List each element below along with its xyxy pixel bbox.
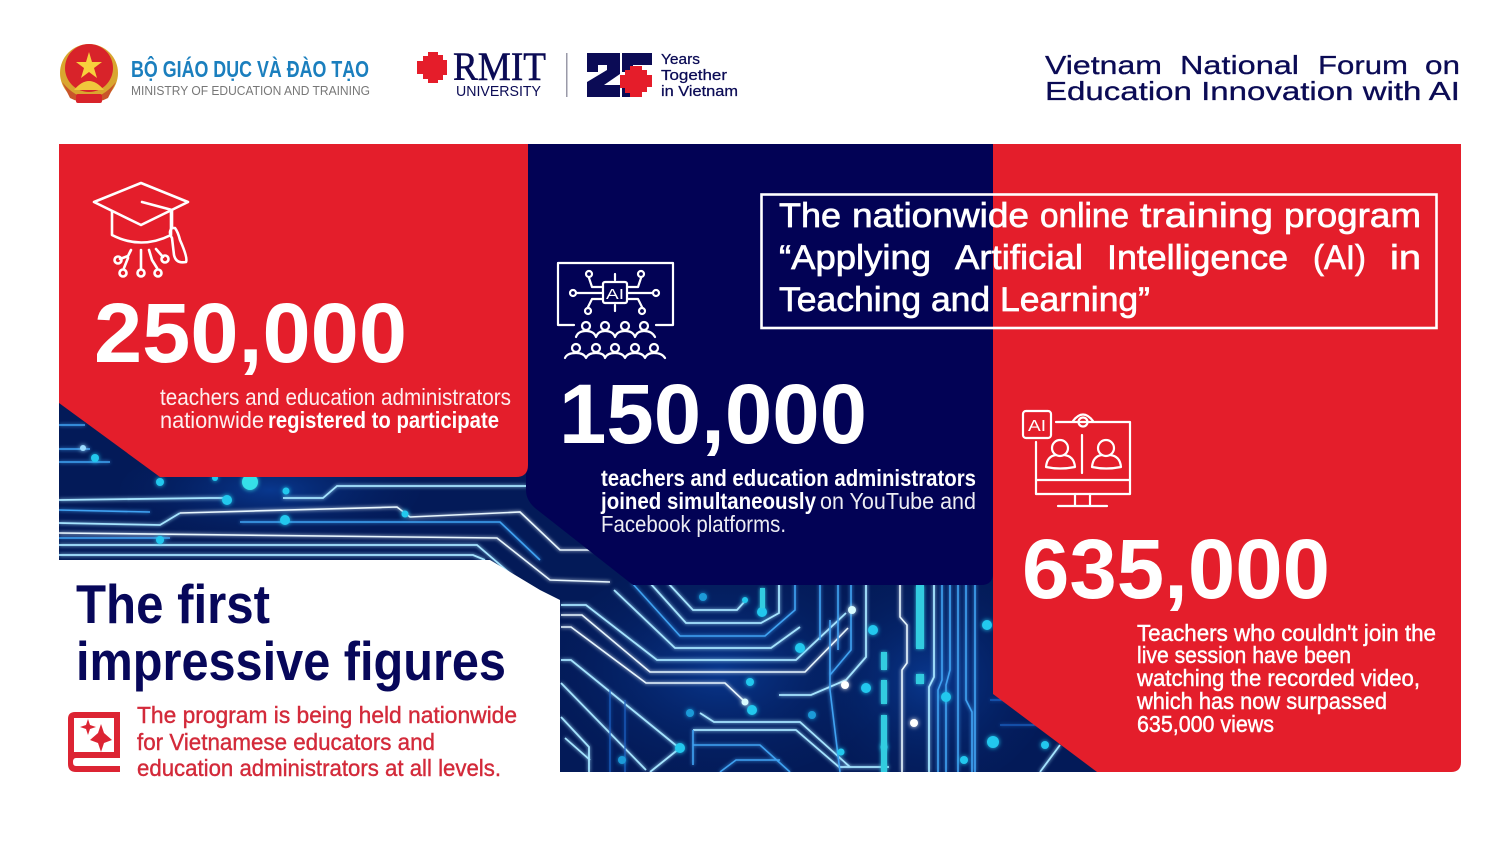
- description 150,000: [600, 465, 976, 537]
- years together text: Years: [661, 52, 700, 68]
- heading: The first impressive figures: impressive figures: [76, 630, 506, 692]
- header: 25 years together logo: [587, 52, 738, 100]
- program title text: in: [1390, 239, 1421, 277]
- number 635,000: 635,000: [1022, 522, 1330, 616]
- header: forum title: Forum: [1318, 50, 1408, 80]
- program title text: [779, 197, 1421, 319]
- number 150,000: 150,000: [559, 367, 867, 461]
- circuit board background image: [59, 403, 1100, 790]
- stat block: 635,000 views: [1022, 411, 1436, 737]
- program title text: (AI): [1313, 239, 1366, 277]
- box outline: [762, 194, 1436, 328]
- description 250,000: nationwide: [160, 407, 264, 433]
- icon: number 25: [587, 53, 652, 97]
- University wordmark: UNIVERSITY: [456, 83, 541, 100]
- header: forum title: National: [1180, 50, 1299, 80]
- RMIT wordmark: RMIT: [453, 44, 546, 89]
- panel: red 250,000: [59, 144, 528, 477]
- header: forum title: Education Innovation with AI: [1045, 76, 1460, 106]
- description 250,000: [160, 384, 511, 433]
- description 150,000: on YouTube and: [820, 488, 976, 514]
- description 150,000: teachers and education administrators: [601, 465, 976, 491]
- years together text: [661, 52, 738, 100]
- heading: The first impressive figures: [76, 573, 506, 692]
- icon: national emblem: [60, 44, 118, 103]
- program title text: Intelligence: [1107, 239, 1288, 277]
- stat block: 250,000 registered: [94, 183, 511, 433]
- description 150,000: joined simultaneously: [600, 488, 816, 514]
- description 250,000: registered to participate: [268, 407, 499, 433]
- panel: red 635,000: [993, 144, 1461, 772]
- description 635,000: Teachers who couldn't join the: [1137, 620, 1436, 646]
- program title text: online: [1040, 197, 1129, 235]
- icon: red book with sparkles: [68, 712, 120, 772]
- header: ministry of education logo: [60, 44, 370, 103]
- description 635,000: 635,000 views: [1137, 711, 1274, 737]
- years together text: Together: [661, 68, 727, 84]
- panel: navy 150,000: [526, 144, 993, 585]
- program title text: The: [779, 197, 841, 235]
- program title text: program: [1284, 197, 1421, 235]
- icon label: AI: AI: [606, 286, 624, 303]
- program title text: “Applying: [779, 239, 931, 277]
- description 150,000: Facebook platforms.: [601, 511, 786, 537]
- panel: white heading area: [59, 560, 560, 790]
- years together text: in Vietnam: [661, 84, 738, 100]
- text block: program description: [137, 702, 517, 781]
- icon: RMIT red pixel circle: [417, 52, 447, 83]
- icon: AI chip with audience: [558, 263, 673, 358]
- icon: monitor with AI and two users: [1023, 411, 1130, 506]
- heading: The first impressive figures: The first: [76, 573, 270, 635]
- text block: program description: education administrators at all levels.: [137, 755, 501, 781]
- callout: program title box: [762, 194, 1436, 328]
- icon: graduation cap with circuits: [94, 183, 188, 276]
- icon label: AI: AI: [1028, 418, 1046, 435]
- header: forum title: on: [1425, 50, 1460, 80]
- description 635,000: live session have been: [1137, 642, 1351, 668]
- text block: program description: The program is being held nationwide: [137, 702, 517, 728]
- number 250,000: 250,000: [94, 286, 407, 380]
- program title text: Artificial: [955, 239, 1083, 277]
- description 635,000: watching the recorded video,: [1136, 665, 1420, 691]
- stat block: 150,000 joined: [558, 263, 976, 537]
- text block: program description: for Vietnamese educators and: [137, 729, 435, 755]
- description 635,000: [1136, 620, 1436, 737]
- program title text: training: [1140, 197, 1273, 235]
- header: RMIT University logo: [417, 44, 546, 100]
- description 250,000: teachers and education administrators: [160, 384, 511, 410]
- header: forum title: Vietnam: [1045, 50, 1162, 80]
- divider between logos: [566, 53, 568, 97]
- ministry name in English: MINISTRY OF EDUCATION AND TRAINING: [131, 83, 370, 98]
- ministry name in Vietnamese: BỘ GIÁO DỤC VÀ ĐÀO TẠO: [131, 55, 369, 82]
- header: forum title: [1045, 50, 1460, 106]
- description 635,000: which has now surpassed: [1136, 688, 1387, 714]
- program title text: Teaching and Learning”: [779, 281, 1150, 319]
- program title text: nationwide: [852, 197, 1029, 235]
